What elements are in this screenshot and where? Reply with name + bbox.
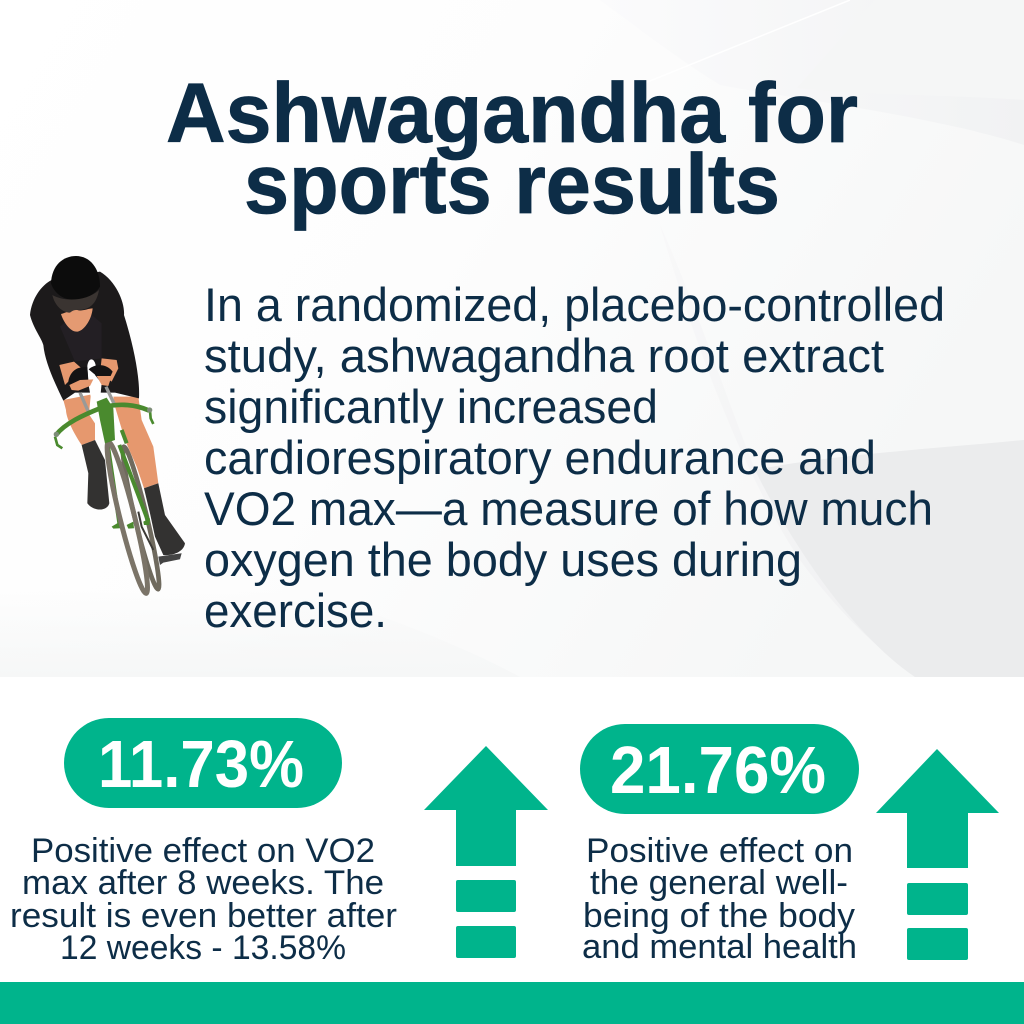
stat pill: 21.76% [580,724,859,814]
fork and frame [107,430,150,529]
face [61,308,93,332]
front wheel [101,440,153,595]
arrow: up left [424,746,548,958]
caption: well-being: being of the body [583,897,856,935]
body text: exercise. [204,585,387,638]
body text: In a randomized, placebo-controlled [204,279,945,332]
chain [138,512,153,550]
caption: VO2 max: Positive effect on VO2 [31,832,375,870]
stat pill: 11.73%: 11.73% [98,727,304,802]
bottom band [0,982,1024,1024]
pedal [158,553,182,565]
body text [204,279,945,638]
arrow: up right [876,749,999,960]
forearms [59,358,118,385]
stat pill: 21.76%: 21.76% [610,733,826,808]
title: Ashwagandha for [166,66,858,160]
icon: cyclist [30,256,185,595]
helmet [51,256,100,300]
body text: study, ashwagandha root extract [204,330,884,383]
white gap [87,359,102,410]
body text: cardiorespiratory endurance and [204,432,876,485]
caption: well-being: and mental health [582,928,857,966]
caption: VO2 max: result is even better after [10,897,397,935]
aero bars [80,387,115,412]
caption: well-being [582,832,857,966]
rear wheel [118,445,164,591]
caption: well-being: Positive effect on [586,832,853,870]
body text: significantly increased [204,381,658,434]
right sock [144,483,185,555]
visor [52,290,99,313]
background panel [0,0,1024,677]
title: sports results [244,137,780,231]
fingers [69,376,112,391]
caption: VO2 max: 12 weeks - 13.58% [60,929,346,967]
handlebar [54,398,153,448]
caption: well-being: the general well- [590,864,848,902]
caption: VO2 max: max after 8 weeks. The [22,864,384,902]
title [166,66,858,231]
left sock [82,440,109,510]
caption: VO2 max [10,832,397,967]
rider left leg [63,393,97,445]
body text: oxygen the body uses during [204,534,802,587]
gloves [68,365,113,388]
body text: VO2 max—a measure of how much [204,483,933,536]
torso [30,272,139,401]
stat pill: 11.73% [64,718,342,808]
rider right leg [113,397,158,488]
